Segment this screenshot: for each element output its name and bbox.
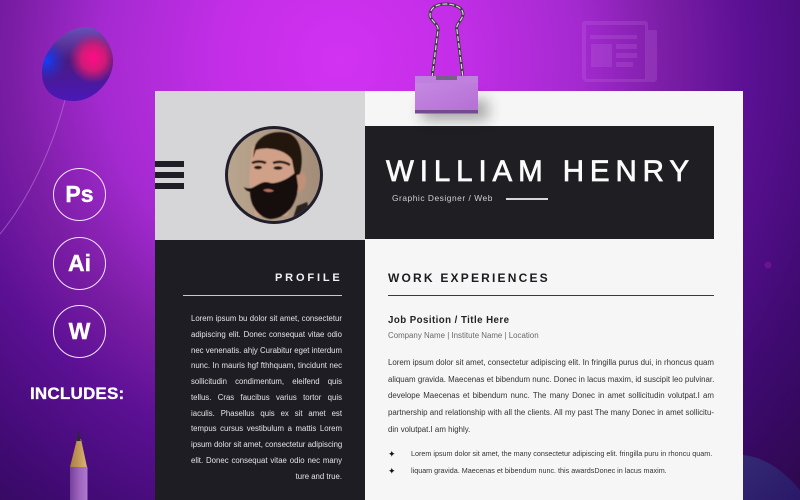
bullet one: Lorem ipsum dolor sit amet, the many consectetur adipiscing elit. fringilla puru in rhoncu quam. xyxy=(411,449,712,458)
panel: name banner xyxy=(365,126,714,239)
work experiences heading: WORK EXPERIENCES xyxy=(388,271,550,285)
job title: Graphic Designer / Web xyxy=(392,193,493,203)
profile paragraph: elit. Donec consequat vitae odio nec many xyxy=(191,456,342,465)
bullet list xyxy=(388,449,712,476)
profile paragraph: tempus cursus vestibulum a mattis Lorem xyxy=(191,424,342,433)
icon: Illustrator badge xyxy=(53,237,106,290)
bullet one: ✦ xyxy=(388,449,396,459)
icon: Photoshop badge: Ps xyxy=(65,181,94,207)
icon: gradient egg balloon xyxy=(42,27,113,101)
panel: profile xyxy=(155,240,365,500)
job description xyxy=(388,358,714,434)
portrait xyxy=(225,126,323,224)
profile paragraph xyxy=(191,314,342,481)
bullet two: liquam gravida. Maecenas et bibendum nunc. this awardsDonec in lacus maxim. xyxy=(411,466,667,475)
profile paragraph: ture and true. xyxy=(296,472,342,481)
icon: hamburger bars xyxy=(155,161,184,189)
job description: Lorem ipsum dolor sit amet, consectetur adipiscing elit. In fringilla purus dui, in rhoncus quam xyxy=(388,358,714,367)
job description: partnership and relationship with all the clients. All my past The many Donec in amet sollicitu- xyxy=(388,408,714,417)
profile paragraph: sollicitudin condimentum, eleifend quis xyxy=(191,377,342,386)
profile paragraph: tellus. Cras faucibus varius tortor quis xyxy=(191,393,342,402)
bullet two: ✦ xyxy=(388,466,396,476)
panel: photo header xyxy=(155,91,365,240)
icon: binder clip xyxy=(414,2,496,126)
profile paragraph: nec venenatis. ahjy Curabitur eget interdum xyxy=(191,346,342,355)
profile paragraph: nunc. In mauris hgf fthhquam, tincidunt nec xyxy=(191,361,342,370)
title rule xyxy=(506,198,548,200)
job description: develope Maecenas et bibendum nunc. The many Donec in amet sollicitudin volutpat.I am xyxy=(388,391,714,400)
profile paragraph: ipsum dolor sit amet, consectetur adipiscing xyxy=(191,440,342,449)
icon: faded newspaper xyxy=(582,21,657,82)
job description: aliquam gravida. Maecenas et bibendum nunc. Donec in lacus maxim, id suscipit leo pulvinar. xyxy=(388,375,714,384)
icon: Photoshop badge xyxy=(53,168,106,221)
job title: Job Position / Title Here xyxy=(388,315,509,326)
icon: pencil xyxy=(70,430,88,500)
icon: Illustrator badge: Ai xyxy=(68,250,91,276)
profile paragraph: Lorem ipsum bu dolor sit amet, consectetur xyxy=(191,314,342,323)
name heading: WILLIAM HENRY xyxy=(386,155,695,188)
profile paragraph: iaculis. Phasellus quis ex sit amet est xyxy=(191,409,342,418)
resume sheet xyxy=(155,91,743,500)
job description: din volutpat.I am highly. xyxy=(388,425,470,434)
includes label: INCLUDES: xyxy=(30,384,124,403)
profile paragraph: adipiscing elit. Donec consequat vitae odio xyxy=(191,330,342,339)
icon: Word badge: W xyxy=(69,318,90,344)
profile rule xyxy=(183,295,342,296)
company line: Company Name | Institute Name | Location xyxy=(388,331,539,340)
icon: Word badge xyxy=(53,305,106,358)
profile heading: PROFILE xyxy=(275,272,343,284)
work rule xyxy=(388,295,714,296)
